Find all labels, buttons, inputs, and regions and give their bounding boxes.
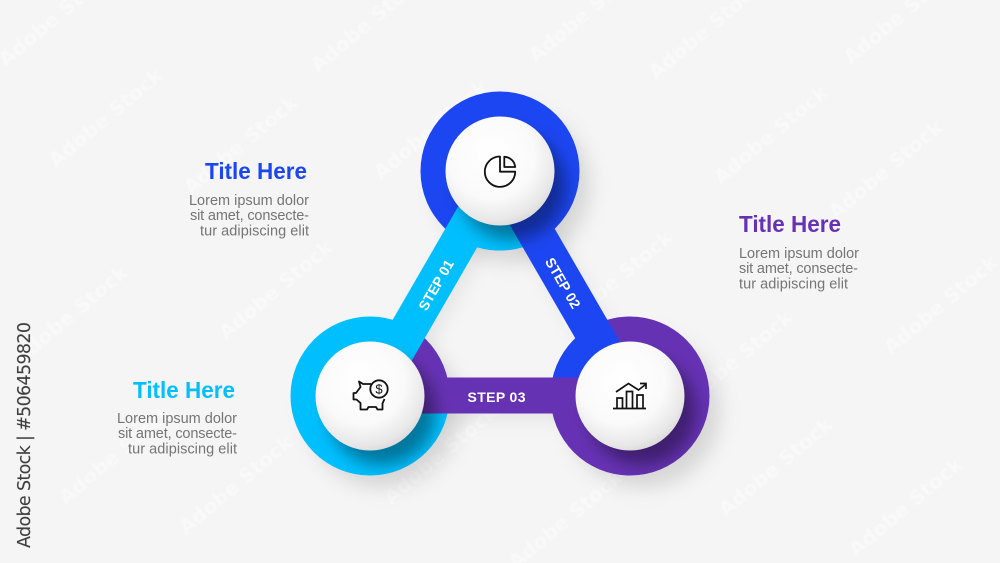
ring: right purple xyxy=(550,316,710,476)
body: tur adipiscing elit xyxy=(128,442,237,458)
heading: Title Here xyxy=(133,377,235,403)
body xyxy=(739,246,859,292)
dollar sign: $ xyxy=(375,382,383,396)
body: Lorem ipsum dolor xyxy=(117,411,237,427)
body: sit amet, consecte- xyxy=(118,426,237,442)
text block: purple title xyxy=(739,211,859,292)
ring: top blue xyxy=(420,92,580,250)
watermark pattern: Adobe Stock xyxy=(714,412,838,521)
watermark pattern: Adobe Stock xyxy=(379,400,503,509)
soft drop shadow of the rings xyxy=(307,110,719,487)
wedge: purple inside left ring xyxy=(412,338,448,378)
watermark pattern: Adobe Stock xyxy=(9,260,133,369)
icon: piggy bank xyxy=(354,380,388,410)
body: Lorem ipsum dolor xyxy=(189,193,309,209)
body: tur adipiscing elit xyxy=(739,276,848,292)
ring: left cyan xyxy=(290,316,450,476)
watermark pattern: Adobe Stock xyxy=(844,452,968,561)
body: Lorem ipsum dolor xyxy=(739,246,859,262)
body xyxy=(117,411,237,458)
text block: blue title xyxy=(189,158,309,240)
step 02 label: STEP 02 xyxy=(542,255,584,311)
band: step 01 xyxy=(354,162,516,405)
watermark pattern: Adobe Stock xyxy=(214,235,338,344)
watermark pattern: Adobe Stock xyxy=(709,80,833,189)
band: step 03 xyxy=(370,378,630,414)
heading: Title Here xyxy=(205,158,307,184)
watermark pattern: Adobe Stock xyxy=(174,430,298,539)
step 03 label: STEP 03 xyxy=(468,389,526,405)
watermark pattern: Adobe Stock xyxy=(54,400,178,509)
triangular ring diagram xyxy=(290,92,710,476)
watermark pattern: Adobe Stock xyxy=(44,63,168,172)
body: sit amet, consecte- xyxy=(739,261,858,277)
watermark pattern: Adobe Stock xyxy=(369,75,493,184)
sphere: right xyxy=(576,342,684,450)
body xyxy=(189,193,309,240)
sphere: left xyxy=(316,342,424,450)
body: sit amet, consecte- xyxy=(190,208,309,224)
watermark pattern: Adobe Stock xyxy=(179,90,303,199)
sphere: top xyxy=(446,116,554,226)
watermark pattern: Adobe Stock xyxy=(879,250,1000,359)
watermark pattern: Adobe Stock xyxy=(824,115,948,224)
heading: Title Here xyxy=(739,211,841,237)
wedge: cyan inside top ring xyxy=(477,224,523,250)
step 01 label: STEP 01 xyxy=(415,257,457,313)
wedge: blue inside right ring xyxy=(552,338,588,378)
body: tur adipiscing elit xyxy=(200,224,309,240)
icon: bar chart with arrow xyxy=(613,384,646,408)
icon: pie chart xyxy=(485,156,515,187)
soft drop shadow of the bands xyxy=(360,170,652,422)
band: step 02 xyxy=(484,162,646,405)
text block: cyan title xyxy=(117,377,237,458)
watermark pattern: Adobe Stock xyxy=(674,305,798,414)
watermark pattern: Adobe Stock xyxy=(554,225,678,334)
infographic canvas xyxy=(16,92,859,548)
stock id side label: Adobe Stock | #506459820 xyxy=(15,322,35,548)
sphere shadows on the ring xyxy=(328,132,696,465)
